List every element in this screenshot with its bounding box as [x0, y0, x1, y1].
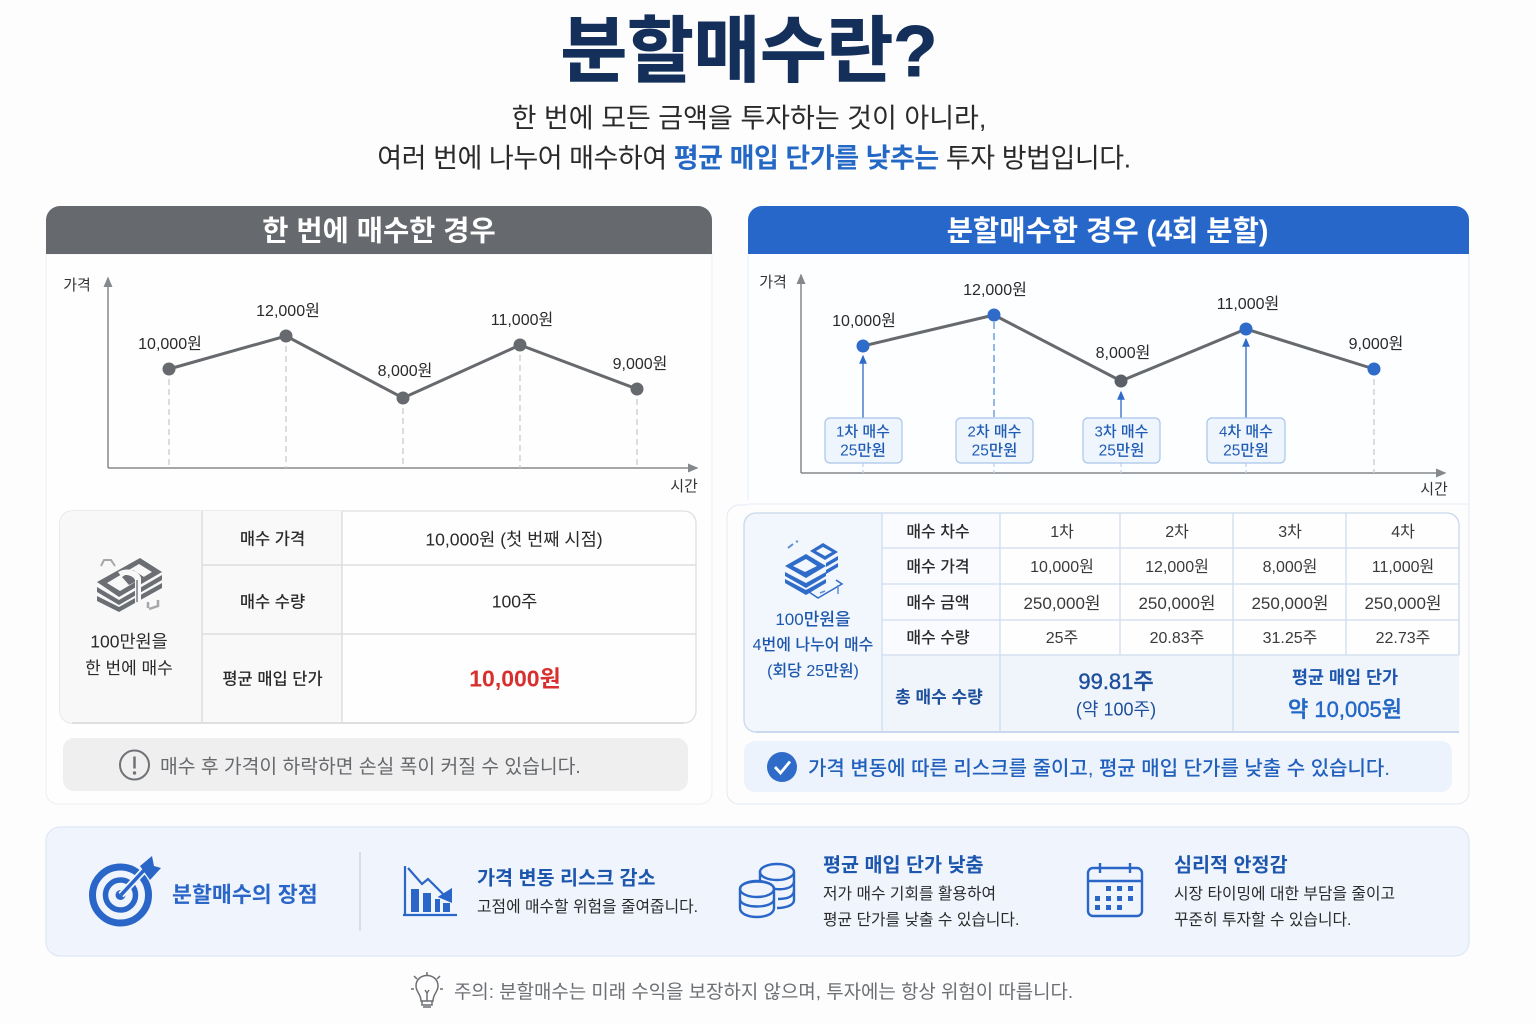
table: lump-sum summary: 매수 가격: [240, 530, 305, 548]
table: split purchase summary: 총 매수 수량: [895, 688, 983, 707]
icon: exclamation: [120, 750, 149, 780]
callout: 1st purchase: 1차 매수: [836, 424, 890, 440]
table: split purchase summary: 22.73주: [1376, 630, 1430, 647]
panel: benefits of split purchase: [46, 827, 1469, 956]
callout: 2nd purchase: [956, 418, 1033, 463]
line chart: lump-sum: 12,000원: [256, 302, 320, 320]
line chart: lump-sum: 10,000원: [138, 335, 202, 353]
line chart: split purchase: 가격: [759, 274, 787, 291]
line chart: lump-sum: 11,000원: [491, 311, 553, 329]
table: split purchase summary: 2차: [1165, 523, 1189, 541]
line chart: split purchase: 8,000원: [1096, 344, 1150, 362]
benefit: lower price-swing risk: [403, 866, 698, 916]
table: split purchase summary: 4차: [1391, 523, 1415, 541]
line chart: split purchase: 시간: [1420, 481, 1448, 498]
benefit: psychological stability: [1088, 854, 1395, 929]
benefit: lower average price: 평균 단가를 낮출 수 있습니다.: [823, 911, 1019, 929]
callout: 3rd purchase: 3차 매수: [1095, 424, 1149, 440]
table: lump-sum summary: 한 번에 매수: [85, 659, 173, 678]
table: split purchase summary: 약 10,005원: [1288, 697, 1402, 722]
table: split purchase summary: 100만원을: [775, 610, 851, 629]
table: split purchase summary: 250,000원: [1138, 594, 1216, 613]
line chart: lump-sum: 8,000원: [378, 362, 432, 380]
benefit: psychological stability: 시장 타이밍에 대한 부담을 줄이고: [1174, 885, 1395, 903]
icon: falling bar chart: [403, 866, 457, 915]
callout: loss warning: [63, 738, 688, 791]
icon: coin stacks: [740, 864, 794, 917]
table: split purchase summary: 250,000원: [1023, 594, 1101, 613]
callout: 4th purchase: 4차 매수: [1219, 424, 1273, 440]
icon: light bulb: [411, 972, 443, 1007]
line chart: split purchase: 10,000원: [832, 312, 896, 330]
table: split purchase summary: 매수 차수: [906, 523, 970, 541]
table: lump-sum summary: 10,000원 (첫 번째 시점): [425, 530, 603, 550]
callout: 3rd purchase: 25만원: [1099, 442, 1144, 460]
callout: risk reduction: [744, 741, 1452, 792]
heading: split purchase: 분할매수한 경우 (4회 분할): [947, 216, 1268, 248]
callout: 4th purchase: 25만원: [1223, 442, 1269, 460]
table: split purchase summary: 250,000원: [1364, 594, 1442, 613]
benefit: lower price-swing risk: 가격 변동 리스크 감소: [477, 868, 656, 890]
callout: 3rd purchase: [1083, 418, 1160, 463]
line chart: lump-sum: 시간: [670, 478, 698, 495]
title: 분할매수란?: [561, 12, 937, 92]
line chart: split purchase: 12,000원: [963, 281, 1027, 299]
table: split purchase summary: 25주: [1046, 630, 1078, 647]
table: split purchase summary: 8,000원: [1263, 558, 1317, 576]
benefit: lower average price: 저가 매수 기회를 활용하여: [823, 885, 996, 903]
table: split purchase summary: (회당 25만원): [767, 662, 859, 680]
table: lump-sum summary: 100주: [492, 592, 537, 612]
footnote: caution: 주의: 분할매수는 미래 수익을 보장하지 않으며, 투자에는 항상 위험이 따릅니다.: [454, 981, 1073, 1003]
table: split purchase summary: 3차: [1278, 523, 1302, 541]
table: lump-sum summary: 100만원을: [90, 632, 168, 652]
line chart: lump-sum: 가격: [63, 277, 91, 294]
footnote: caution: [411, 972, 1073, 1007]
table: split purchase summary: 250,000원: [1251, 594, 1329, 613]
table: split purchase summary: 4번에 나누어 매수: [753, 636, 873, 654]
line chart: split purchase: [759, 274, 1448, 498]
heading: benefits: 분할매수의 장점: [172, 882, 318, 907]
table: split purchase summary: 평균 매입 단가: [1292, 668, 1398, 688]
subtitle: [377, 104, 1131, 174]
table: split purchase summary: 1차: [1050, 523, 1074, 541]
table: split purchase summary: 99.81주: [1078, 669, 1154, 694]
table: lump-sum summary: 매수 수량: [240, 592, 305, 612]
table: split purchase summary: [744, 513, 1459, 732]
icon: money stack: [97, 558, 162, 612]
callout: 4th purchase: [1207, 418, 1285, 463]
table: lump-sum summary: [60, 511, 696, 723]
table: split purchase summary: (약 100주): [1076, 700, 1156, 720]
benefit: psychological stability: 심리적 안정감: [1174, 854, 1288, 876]
callout: 2nd purchase: 25만원: [972, 442, 1017, 460]
panel: lump-sum purchase: [46, 206, 712, 804]
table: split purchase summary: 매수 금액: [906, 594, 970, 612]
callout: 1st purchase: 25만원: [840, 442, 886, 460]
line chart: lump-sum: [63, 277, 698, 495]
benefit: lower average price: [740, 854, 1019, 929]
heading: lump-sum: [46, 206, 712, 254]
icon: calendar: [1088, 863, 1142, 916]
callout: 1st purchase: [825, 418, 902, 463]
line chart: split purchase: 9,000원: [1349, 335, 1403, 353]
table: lump-sum summary: 평균 매입 단가: [222, 670, 323, 688]
callout: risk reduction: 가격 변동에 따른 리스크를 줄이고, 평균 매입 단가를 낮출 수 있습니다.: [808, 757, 1390, 780]
heading: lump-sum: 한 번에 매수한 경우: [262, 216, 496, 248]
benefit: psychological stability: 꾸준히 투자할 수 있습니다.: [1174, 911, 1351, 929]
heading: split purchase: [748, 206, 1469, 254]
table: split purchase summary: 매수 수량: [906, 629, 970, 647]
table: lump-sum summary: 10,000원: [469, 666, 561, 692]
panel: split purchase: [727, 206, 1469, 804]
line chart: lump-sum: 9,000원: [613, 355, 667, 373]
table: split purchase summary: 매수 가격: [906, 558, 970, 576]
table: split purchase summary: 11,000원: [1372, 558, 1434, 576]
table: split purchase summary: 31.25주: [1263, 630, 1317, 647]
subtitle: 한 번에 모든 금액을 투자하는 것이 아니라,: [512, 104, 986, 134]
icon: split money stack: [785, 541, 842, 598]
benefit: lower price-swing risk: 고점에 매수할 위험을 줄여줍니다.: [477, 898, 698, 916]
icon: check badge: [767, 752, 797, 782]
table: split purchase summary: 10,000원: [1030, 558, 1094, 576]
line chart: split purchase: 11,000원: [1217, 295, 1279, 313]
subtitle: 여러 번에 나누어 매수하여 평균 매입 단가를 낮추는 투자 방법입니다.: [377, 144, 1131, 174]
table: split purchase summary: 20.83주: [1150, 630, 1204, 647]
icon: target: [92, 856, 161, 923]
benefit: lower average price: 평균 매입 단가 낮춤: [823, 854, 984, 876]
table: split purchase summary: 12,000원: [1145, 558, 1209, 576]
callout: 2nd purchase: 2차 매수: [968, 424, 1022, 440]
callout: loss warning: 매수 후 가격이 하락하면 손실 폭이 커질 수 있습니다.: [160, 756, 581, 778]
